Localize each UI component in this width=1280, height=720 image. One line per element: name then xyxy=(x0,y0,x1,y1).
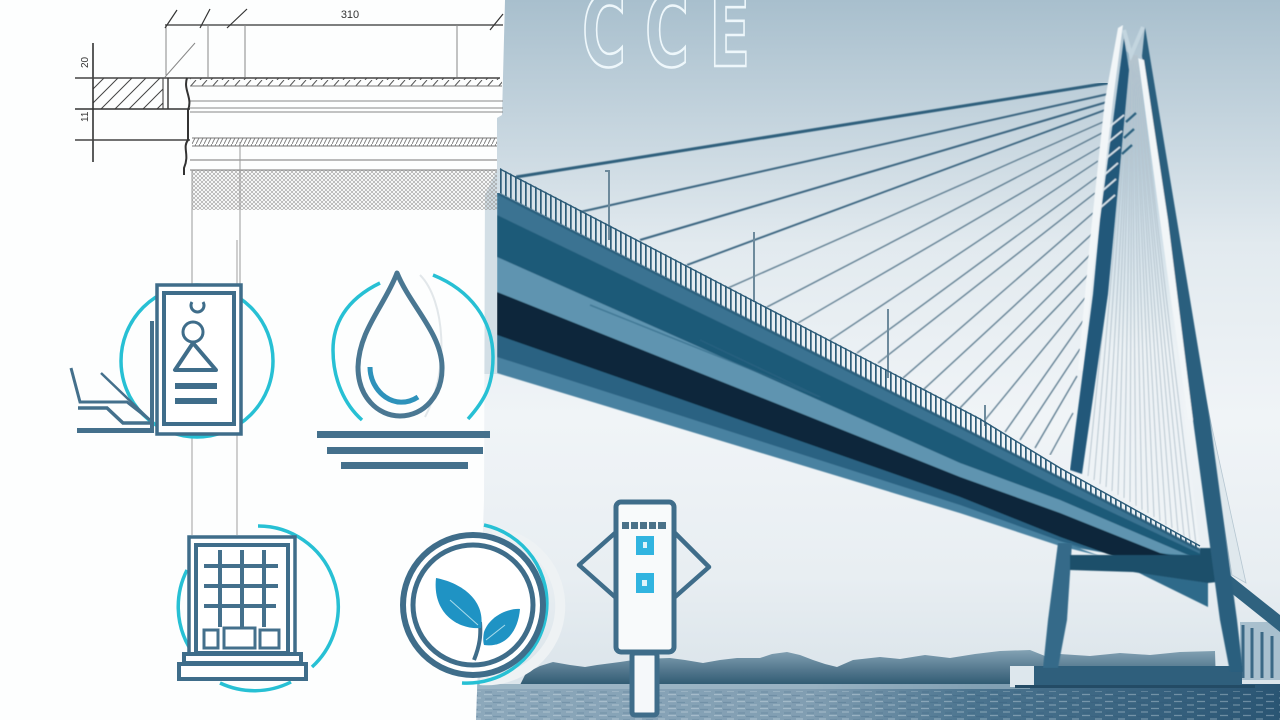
cyan arc xyxy=(462,525,547,683)
bridge railing xyxy=(500,168,1200,550)
bridge tower xyxy=(1070,25,1243,672)
building base xyxy=(179,654,306,679)
dimension label lower: 11 xyxy=(80,111,91,122)
cyan ring xyxy=(121,285,273,437)
water lines xyxy=(317,431,490,469)
drop outline xyxy=(358,273,442,416)
building frame xyxy=(189,537,295,654)
pale strip at photo edge xyxy=(484,190,497,374)
soft shadow arc xyxy=(480,532,560,680)
sky xyxy=(470,0,1280,720)
icon: certification document xyxy=(71,285,273,437)
sensor body xyxy=(616,502,674,652)
icon: leaf in circle xyxy=(403,525,560,683)
cyan arcs xyxy=(333,275,493,420)
pier base xyxy=(1010,666,1255,688)
far bridge span xyxy=(1230,576,1280,680)
window grid xyxy=(204,550,278,627)
tree line on horizon xyxy=(520,650,1216,685)
post xyxy=(632,653,657,715)
dimension lines xyxy=(75,9,503,535)
bridge deck xyxy=(497,193,1205,570)
water xyxy=(470,684,1280,720)
cables between tower legs xyxy=(1083,50,1200,548)
hand / tray xyxy=(71,321,153,433)
big leaf xyxy=(436,578,482,628)
stem xyxy=(474,622,480,660)
lower blue square xyxy=(636,573,654,593)
technical drawing xyxy=(75,9,503,535)
icon: building xyxy=(178,526,338,691)
left white background panel xyxy=(0,0,510,720)
document xyxy=(157,285,241,434)
faint grey arc xyxy=(420,275,441,417)
ground floor windows xyxy=(204,628,279,648)
side wings xyxy=(579,533,709,597)
cables right of tower xyxy=(1206,400,1246,584)
upper blue square xyxy=(636,536,654,555)
small leaf xyxy=(483,609,520,645)
cyan ring xyxy=(178,526,338,691)
hatched sections xyxy=(93,78,502,210)
stay cables left fan xyxy=(516,83,1108,455)
leaf veins xyxy=(450,600,505,640)
dimension label upper: 20 xyxy=(80,56,91,68)
white disc and rings xyxy=(403,535,543,675)
icon: sensor post xyxy=(579,502,709,715)
indicator row xyxy=(622,522,666,529)
pier leg and crossbeam xyxy=(1043,543,1217,668)
lamp posts xyxy=(605,171,985,426)
dimension label top: 310 xyxy=(341,9,359,21)
bridge photo panel xyxy=(470,0,1280,720)
icon: water drop xyxy=(317,273,493,469)
inner arc xyxy=(370,367,418,402)
